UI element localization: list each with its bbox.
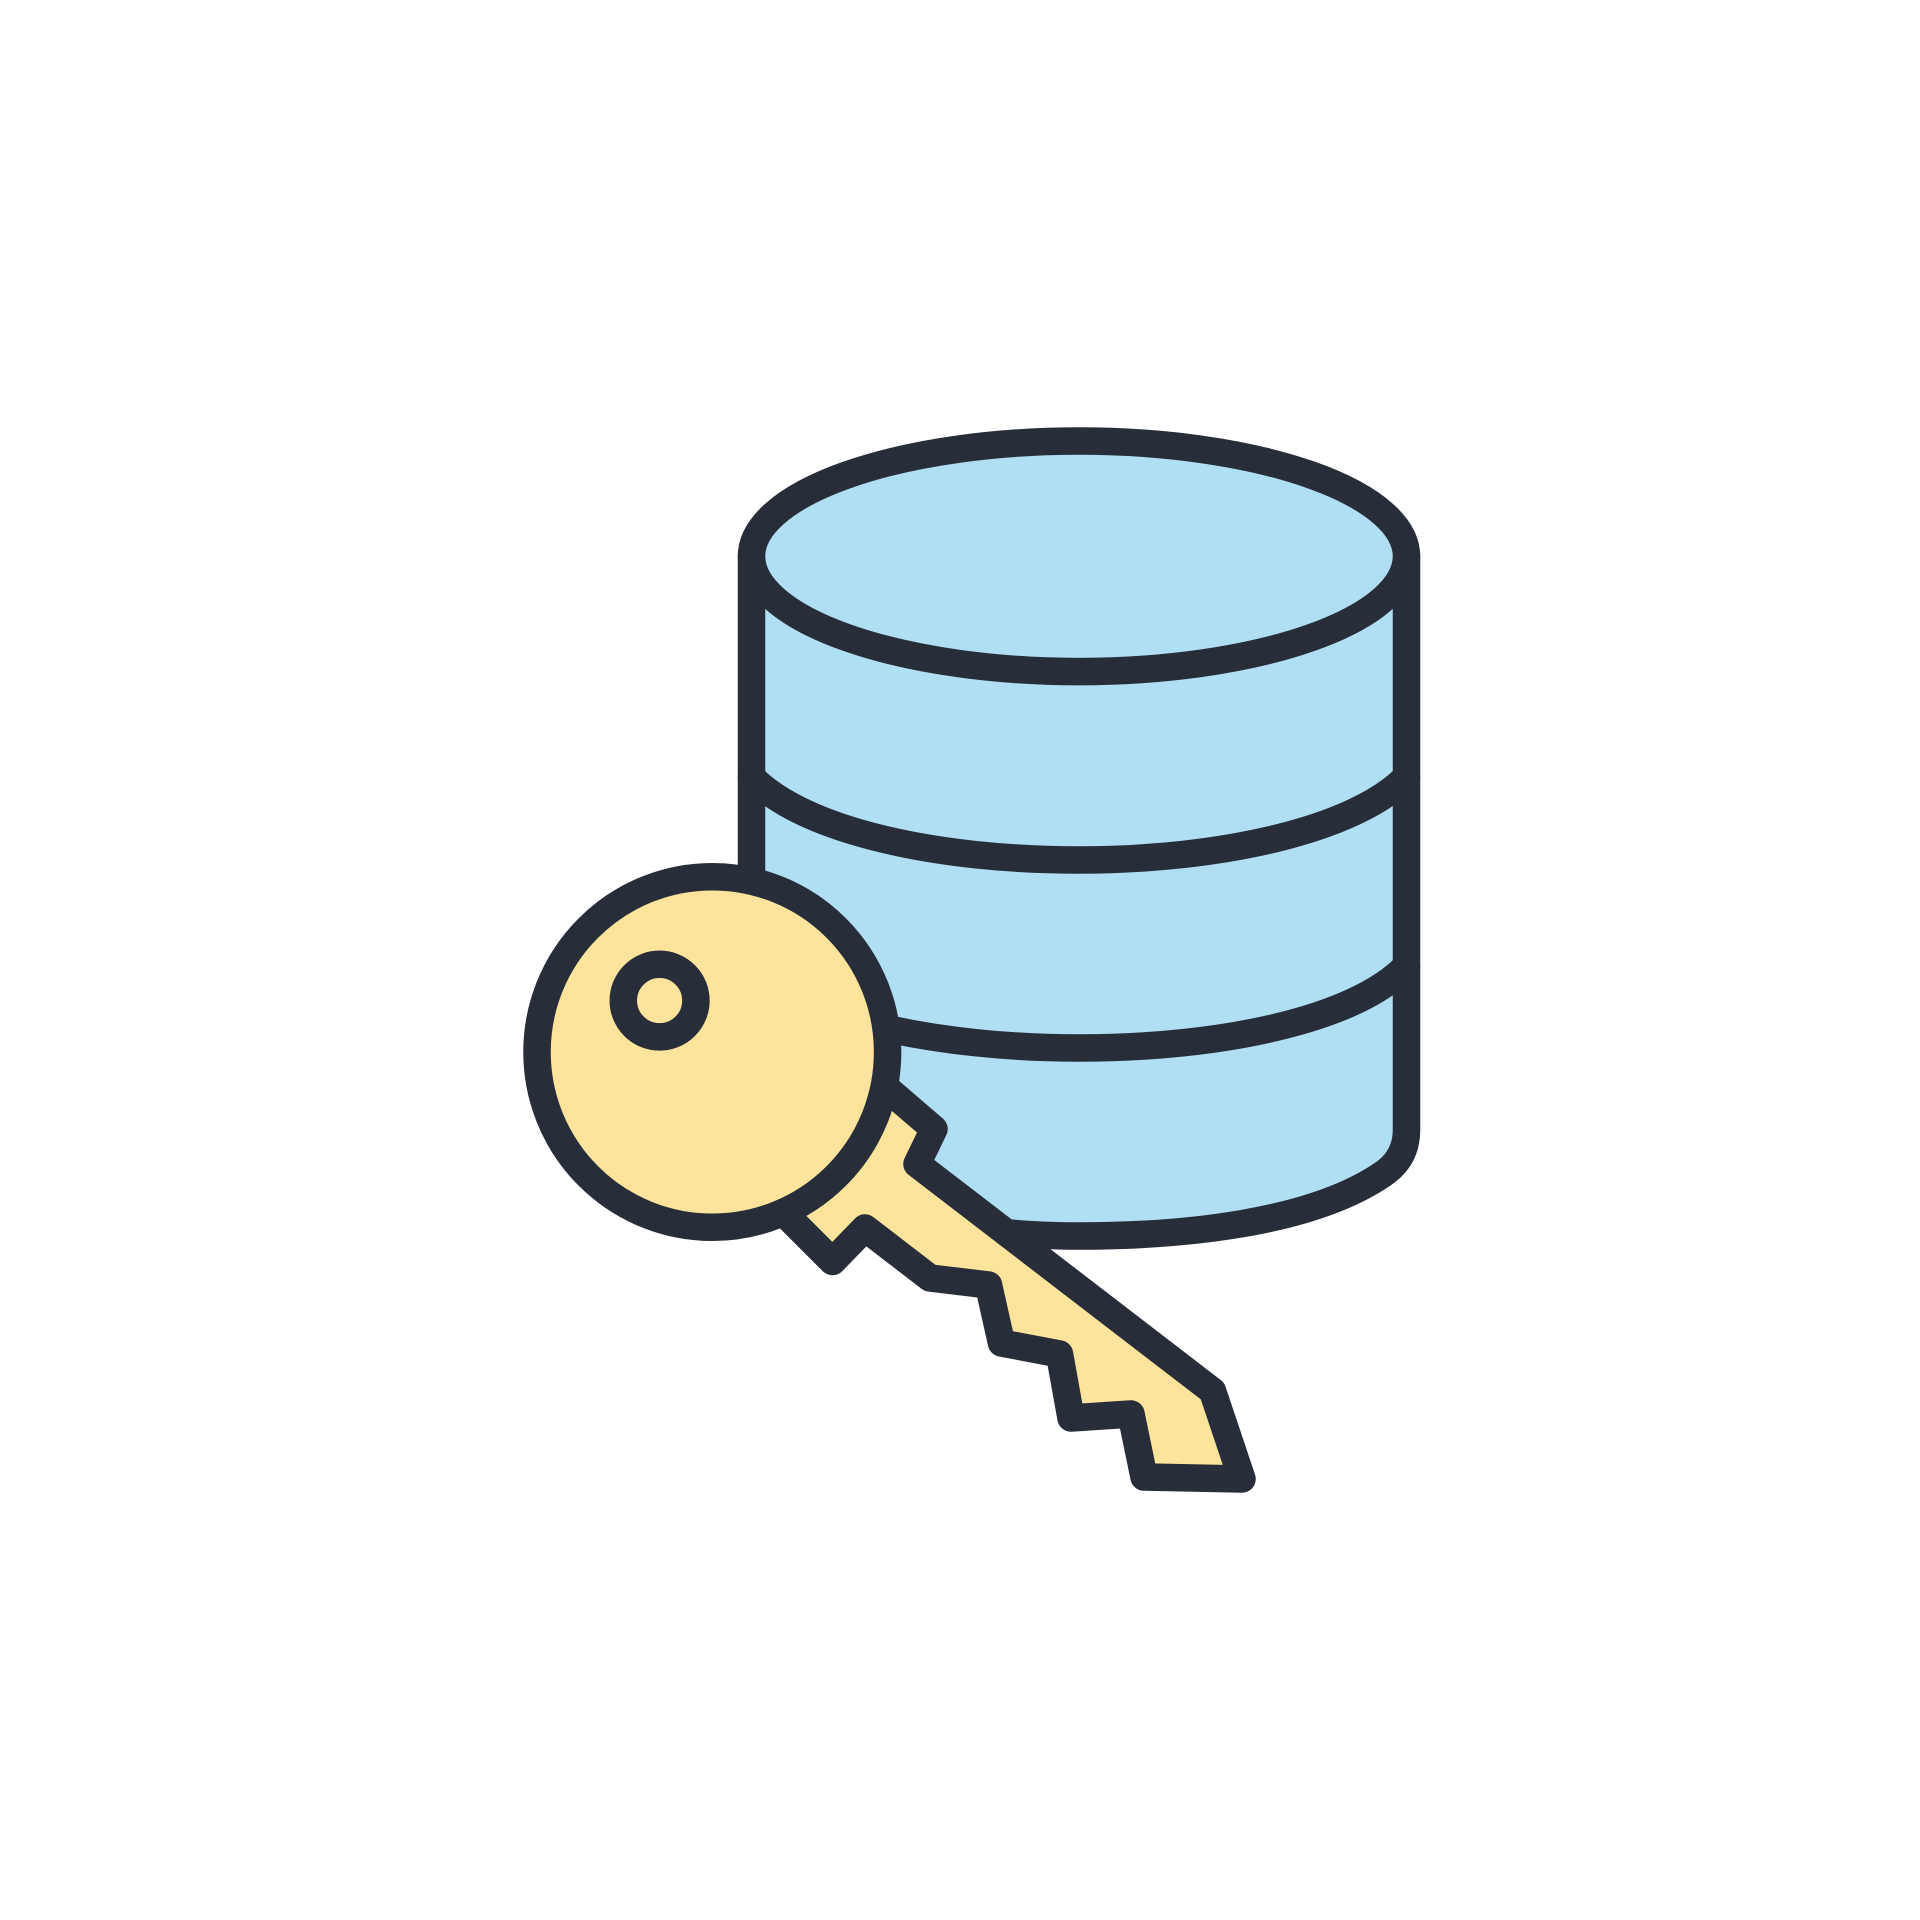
- lower band line: [880, 966, 1406, 1048]
- icon: key: [537, 877, 1242, 1479]
- key hole: [623, 964, 696, 1037]
- cylinder body fill: [752, 556, 1406, 1236]
- top ellipse: [752, 441, 1406, 672]
- cylinder outline: [752, 556, 1406, 1236]
- key head: [537, 877, 888, 1227]
- icon: database cylinder: [752, 441, 1406, 1236]
- key blade: [775, 1074, 1242, 1479]
- upper band line: [752, 777, 1406, 860]
